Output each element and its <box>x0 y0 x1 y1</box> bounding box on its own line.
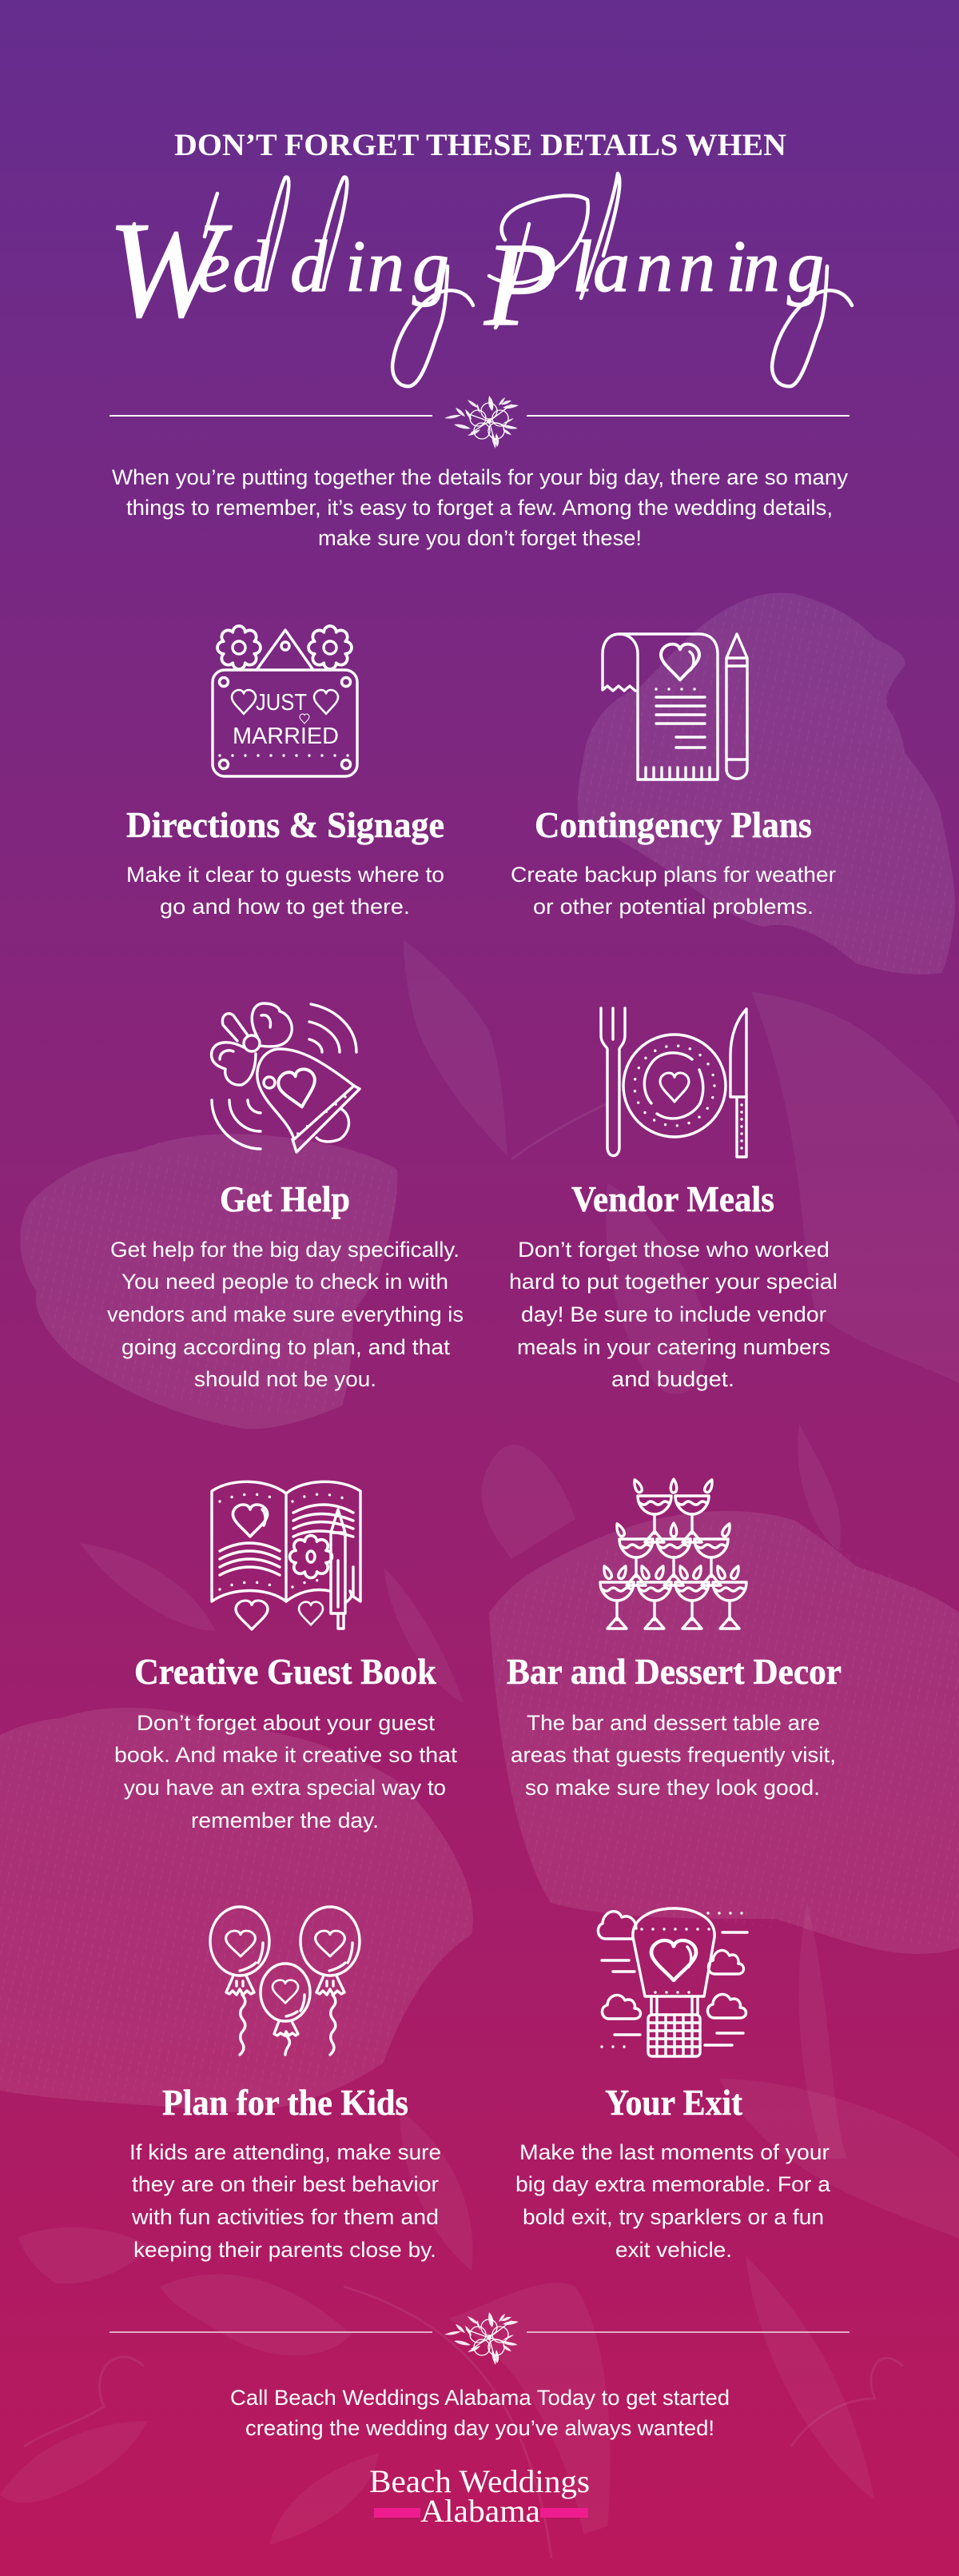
body text: Don’t forget those who worked <box>518 1238 830 1262</box>
icon: just married sign <box>213 626 357 776</box>
panel: your exit <box>515 1908 831 2262</box>
panel: directions and signage <box>126 626 444 919</box>
logo: Beach Weddings Alabama: Alabama <box>420 2493 540 2529</box>
intro text: make sure you don’t forget these! <box>318 526 642 550</box>
title: Wedding Planning: lanning <box>572 225 824 307</box>
body text <box>107 1238 464 1391</box>
heading: Directions & Signage <box>126 804 444 845</box>
body text: meals in your catering numbers <box>517 1335 830 1359</box>
title: Wedding Planning: P <box>483 218 558 351</box>
body text: You need people to check in with <box>121 1270 448 1294</box>
body text: areas that guests frequently visit, <box>511 1743 836 1767</box>
heading: Plan for the Kids <box>162 2082 408 2123</box>
panel: get help <box>107 1003 464 1391</box>
logo: Beach Weddings Alabama: Beach Weddings <box>369 2463 590 2499</box>
body text: Create backup plans for weather <box>511 863 836 887</box>
icon: heart balloons <box>210 1907 360 2055</box>
body text: book. And make it creative so that <box>114 1743 458 1767</box>
body text: they are on their best behavior <box>132 2172 439 2196</box>
body text: Make the last moments of your <box>519 2140 830 2164</box>
subtitle: DON’T FORGET THESE DETAILS WHEN <box>174 128 786 162</box>
body text: Make it clear to guests where to <box>126 863 444 887</box>
body text <box>515 2140 831 2262</box>
title: Wedding Planning: W <box>107 194 233 346</box>
intro text: When you’re putting together the details for your big day, there are so many <box>112 465 849 489</box>
intro text <box>112 465 849 550</box>
ornament: floral sprig <box>444 2312 519 2365</box>
panel: bar and dessert decor <box>507 1478 842 1800</box>
body text <box>511 863 836 919</box>
heading: Get Help <box>220 1178 350 1219</box>
call to action text: creating the wedding day you’ve always wanted! <box>245 2416 714 2440</box>
panel: plan for the kids <box>129 1907 441 2262</box>
intro text: things to remember, it’s easy to forget a few. Among the wedding details, <box>126 496 833 520</box>
body text <box>114 1711 458 1832</box>
body text: vendors and make sure everything is <box>107 1302 464 1326</box>
title: Wedding Planning <box>107 173 852 386</box>
icon: scroll and pencil <box>603 634 747 780</box>
icon: hot air balloon <box>598 1908 747 2056</box>
body text: you have an extra special way to <box>124 1776 446 1800</box>
body text: Don’t forget about your guest <box>137 1711 436 1735</box>
body text: hard to put together your special <box>509 1270 838 1294</box>
body text: big day extra memorable. For a <box>515 2172 831 2196</box>
icon: wedding bell with bow <box>212 1003 360 1152</box>
body text <box>511 1711 836 1800</box>
title: Wedding Planning: edding <box>197 225 449 307</box>
body text <box>126 863 444 919</box>
icon: just married sign: MARRIED <box>233 724 339 749</box>
body text <box>509 1238 838 1391</box>
body text <box>129 2140 441 2262</box>
icon: plate, fork and knife <box>601 1008 746 1157</box>
body text: go and how to get there. <box>160 895 410 919</box>
heading: Bar and Dessert Decor <box>507 1651 842 1692</box>
heading: Your Exit <box>605 2082 743 2123</box>
background floral pattern <box>0 593 959 2558</box>
bottom divider <box>109 2312 850 2365</box>
top divider <box>109 396 850 449</box>
heading: Vendor Meals <box>571 1178 774 1219</box>
icon: champagne tower <box>600 1478 746 1629</box>
body text: keeping their parents close by. <box>133 2238 436 2262</box>
body text: Get help for the big day specifically. <box>110 1238 460 1262</box>
panel: creative guest book <box>114 1481 458 1832</box>
heading: Contingency Plans <box>535 804 812 845</box>
body text: should not be you. <box>194 1367 376 1391</box>
body text: so make sure they look good. <box>525 1776 820 1800</box>
body text: bold exit, try sparklers or a fun <box>523 2205 824 2229</box>
icon: just married sign: JUST <box>256 690 307 716</box>
body text: exit vehicle. <box>615 2238 732 2262</box>
body text: day! Be sure to include vendor <box>521 1302 826 1326</box>
body text: The bar and dessert table are <box>527 1711 820 1735</box>
panel: vendor meals <box>509 1008 838 1391</box>
title flourishes <box>129 173 852 386</box>
body text: and budget. <box>611 1367 734 1391</box>
body text: or other potential problems. <box>533 895 814 919</box>
panel: contingency plans <box>511 634 836 919</box>
body text: remember the day. <box>191 1808 379 1832</box>
logo: Beach Weddings Alabama <box>369 2463 590 2529</box>
icon: open guest book and pen <box>212 1481 360 1629</box>
body text: If kids are attending, make sure <box>129 2140 441 2164</box>
body text: with fun activities for them and <box>131 2205 439 2229</box>
ornament: floral sprig <box>444 396 519 449</box>
body text: going according to plan, and that <box>121 1335 451 1359</box>
heading: Creative Guest Book <box>134 1651 436 1692</box>
call to action text: Call Beach Weddings Alabama Today to get started <box>230 2386 730 2410</box>
call to action text <box>230 2386 730 2440</box>
